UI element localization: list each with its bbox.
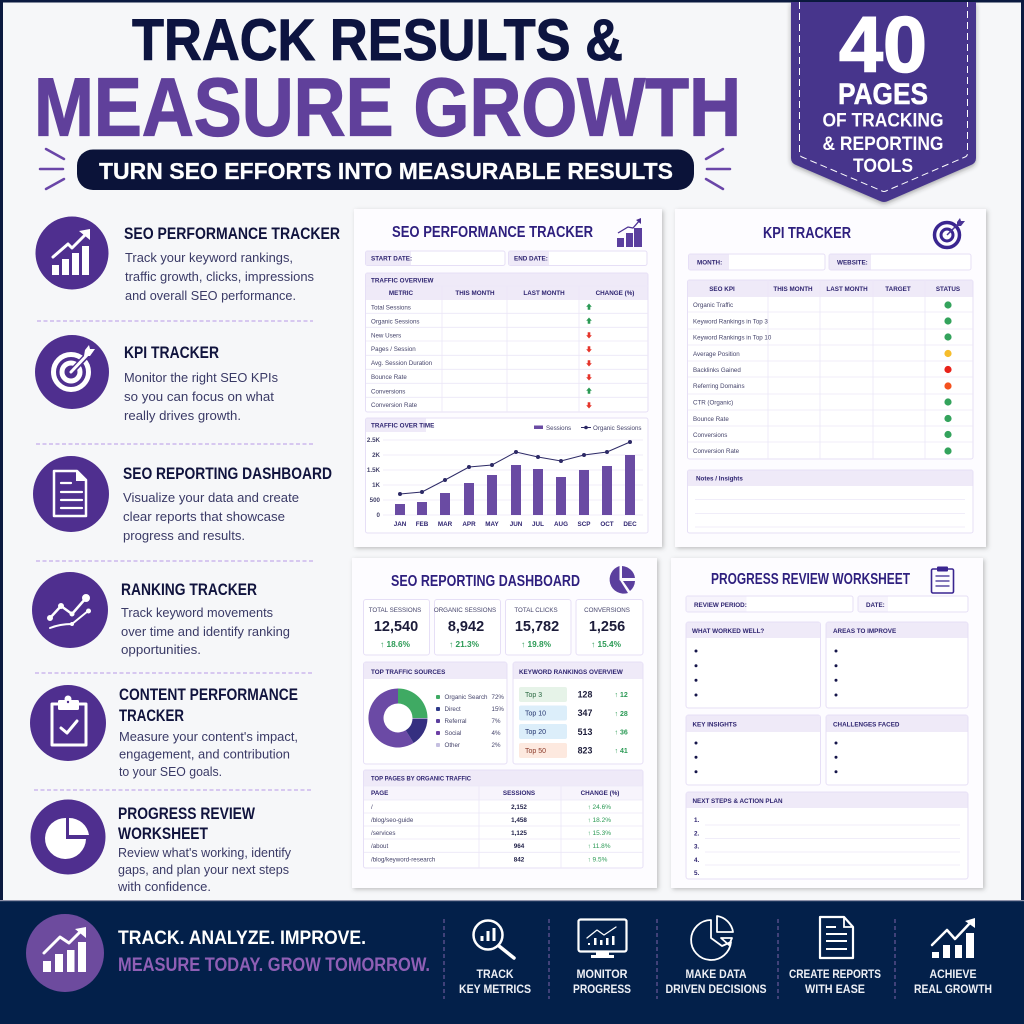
- footer tagline: [118, 927, 430, 976]
- panel title: SEO PERFORMANCE TRACKER: [392, 224, 593, 241]
- panel title: SEO REPORTING DASHBOARD: [391, 573, 580, 590]
- description: Review what's working, identify: [118, 845, 291, 860]
- keyword rankings overview: 513: [578, 727, 592, 737]
- icon: document: [33, 456, 109, 532]
- icon: ranking lines: [32, 572, 108, 648]
- fields: MONTH:: [697, 260, 722, 266]
- keyword rankings overview: ↑ 41: [614, 748, 628, 755]
- legend: Direct: [444, 706, 461, 713]
- table: SEO KPI: Bounce Rate: [693, 416, 729, 423]
- table: SEO KPI: Conversions: [693, 432, 727, 439]
- description: Visualize your data and create: [123, 490, 299, 505]
- KPI cards: ↑ 18.6%: [380, 639, 411, 649]
- icon: clipboard check: [30, 685, 106, 761]
- line: organic sessions: [398, 440, 632, 496]
- table: traffic overview: Avg. Session Duration: [371, 360, 433, 367]
- date fields: [366, 251, 647, 266]
- donut chart: [368, 688, 428, 747]
- table: traffic overview: Conversions: [371, 388, 405, 396]
- table: traffic overview: CHANGE (%): [596, 290, 634, 297]
- description: [123, 490, 299, 543]
- fields: DATE:: [866, 602, 885, 609]
- table: top pages by organic traffic: 2,152: [511, 804, 527, 811]
- table: top pages by organic traffic: ↑ 24.6%: [588, 804, 611, 811]
- table: top pages by organic traffic: TOP PAGES BY ORGANIC TRAFFIC: [371, 776, 471, 782]
- feature: achieve real growth: REAL GROWTH: [914, 982, 992, 996]
- section: challenges faced: CHALLENGES FACED: [833, 722, 900, 728]
- description: clear reports that showcase: [123, 509, 285, 524]
- top traffic sources: [364, 662, 507, 764]
- chart: traffic over time: [366, 418, 648, 533]
- description: over time and identify ranking: [121, 624, 290, 639]
- badge: 40 pages: TOOLS: [853, 155, 913, 177]
- chart: traffic over time: AUG: [554, 521, 568, 528]
- heading: SEO REPORTING DASHBOARD: [123, 465, 332, 483]
- keyword rankings overview: KEYWORD RANKINGS OVERVIEW: [519, 669, 623, 676]
- keyword rankings overview: Top 3: [525, 692, 542, 699]
- title: TRACK RESULTS &: [132, 8, 623, 73]
- fields: [686, 596, 968, 612]
- panel title: KPI TRACKER: [763, 225, 851, 242]
- table: traffic overview: LAST MONTH: [523, 290, 565, 297]
- feature: achieve real growth: [914, 918, 992, 996]
- section: next steps and action plan: 3.: [694, 844, 700, 850]
- keyword rankings overview: Top 10: [525, 710, 546, 718]
- description: Monitor the right SEO KPIs: [124, 370, 278, 385]
- heading: RANKING TRACKER: [121, 581, 257, 599]
- badge: 40 pages: [791, 0, 976, 202]
- description: gaps, and plan your next steps: [118, 862, 289, 877]
- table: top pages by organic traffic: 964: [514, 843, 525, 850]
- table: traffic overview: New Users: [371, 332, 401, 340]
- section: areas to improve: AREAS TO IMPROVE: [833, 628, 896, 635]
- table: traffic overview: Bounce Rate: [371, 374, 407, 381]
- feature: make data driven decisions: DRIVEN DECISIONS: [666, 982, 766, 996]
- icon: clipboard: [932, 566, 954, 593]
- date fields: START DATE:: [371, 256, 412, 262]
- keyword rankings overview: 128: [578, 690, 592, 700]
- feature: achieve real growth: ACHIEVE: [930, 967, 976, 981]
- description: with confidence.: [117, 879, 211, 894]
- table: SEO KPI: STATUS: [936, 286, 960, 293]
- item: KPI tracker: [35, 335, 278, 423]
- description: Track keyword movements: [121, 605, 273, 620]
- feature: monitor progress: [573, 920, 631, 996]
- section: next steps and action plan: 4.: [694, 857, 700, 864]
- icon: growth chart: [36, 216, 108, 290]
- description: [124, 370, 278, 423]
- keyword rankings overview: ↑ 12: [614, 692, 628, 699]
- KPI cards: ↑ 21.3%: [449, 639, 480, 649]
- feature: make data driven decisions: MAKE DATA: [686, 967, 747, 981]
- table: top pages by organic traffic: SESSIONS: [503, 790, 535, 797]
- section: what worked well: [686, 622, 820, 708]
- description: progress and results.: [123, 528, 245, 543]
- legend: Organic Sessions: [593, 425, 642, 432]
- heading: PROGRESS REVIEW: [118, 805, 255, 823]
- icon: monitor: [578, 920, 626, 958]
- heading: SEO PERFORMANCE TRACKER: [124, 225, 340, 243]
- legend: Referral: [444, 718, 467, 725]
- KPI cards: [364, 600, 643, 655]
- description: [119, 729, 298, 779]
- table: SEO KPI: Referring Domains: [693, 383, 745, 390]
- KPI cards: ORGANIC SESSIONS: [434, 607, 496, 614]
- description: [125, 250, 314, 303]
- subtitle pill: TURN SEO EFFORTS INTO MEASURABLE RESULTS: [99, 158, 673, 184]
- section: key insights: KEY INSIGHTS: [692, 722, 737, 728]
- legend: Other: [444, 742, 460, 749]
- keyword rankings overview: Top 50: [525, 748, 546, 755]
- KPI cards: 15,782: [515, 619, 559, 635]
- badge: 40 pages: OF TRACKING: [822, 110, 944, 132]
- KPI cards: TOTAL CLICKS: [514, 607, 558, 614]
- footer tagline: MEASURE TODAY. GROW TOMORROW.: [118, 954, 430, 976]
- KPI cards: CONVERSIONS: [584, 607, 630, 614]
- keyword rankings overview: 823: [578, 746, 592, 756]
- keyword rankings overview: 347: [578, 708, 592, 718]
- footer band: [0, 900, 1024, 1024]
- feature: track key metrics: [459, 920, 531, 996]
- item: content performance tracker: [30, 685, 298, 779]
- table: top pages by organic traffic: ↑ 11.8%: [588, 843, 611, 850]
- title: [34, 8, 741, 154]
- table: traffic overview: Pages / Session: [371, 346, 416, 353]
- section: next steps and action plan: NEXT STEPS & ACTION PLAN: [692, 798, 783, 805]
- feature: track key metrics: TRACK: [476, 967, 514, 981]
- table: SEO KPI: LAST MONTH: [826, 286, 868, 293]
- chart: traffic over time: APR: [462, 521, 476, 528]
- chart: traffic over time: JUN: [510, 521, 523, 528]
- legend: Organic Search: [444, 694, 488, 701]
- description: opportunities.: [121, 642, 201, 657]
- KPI cards: 8,942: [448, 619, 484, 635]
- table: SEO KPI: Conversion Rate: [693, 448, 740, 455]
- heading: [119, 686, 298, 725]
- keyword rankings overview: ↑ 28: [614, 711, 628, 718]
- KPI cards: TOTAL SESSIONS: [369, 607, 421, 614]
- legend: 15%: [492, 706, 504, 713]
- footer logo icon: [26, 914, 104, 992]
- chart: traffic over time: SCP: [578, 521, 590, 528]
- table: traffic overview: Total Sessions: [371, 304, 411, 312]
- section: areas to improve: [826, 622, 968, 708]
- fields: [688, 254, 971, 270]
- table: SEO KPI: Keyword Rankings in Top 10: [693, 334, 772, 342]
- feature: monitor progress: MONITOR: [576, 967, 628, 981]
- table: top pages by organic traffic: /blog/seo-guide: [371, 817, 414, 824]
- chart: traffic over time: 500: [370, 497, 381, 504]
- KPI cards: ↑ 19.8%: [521, 639, 552, 649]
- heading: TRACKER: [119, 707, 184, 725]
- keyword rankings overview: ↑ 36: [614, 730, 628, 736]
- badge: 40 pages: 40: [839, 0, 927, 88]
- panel: KPI tracker: [675, 209, 986, 547]
- chart: traffic over time: OCT: [600, 521, 614, 528]
- table: traffic overview: METRIC: [389, 290, 414, 297]
- legend: 7%: [492, 718, 501, 725]
- chart: traffic over time: MAY: [485, 521, 500, 528]
- icon: target: [35, 335, 109, 409]
- heading: KPI TRACKER: [124, 344, 219, 362]
- chart: traffic over time: 2K: [372, 452, 381, 459]
- table: top pages by organic traffic: 1,458: [511, 817, 527, 824]
- bars: [395, 455, 635, 515]
- keyword rankings overview: [513, 662, 643, 764]
- table: top pages by organic traffic: PAGE: [371, 790, 388, 797]
- feature: monitor progress: PROGRESS: [573, 982, 631, 996]
- legend: Social: [444, 730, 461, 737]
- panel title: PROGRESS REVIEW WORKSHEET: [711, 571, 910, 588]
- section: key insights: [686, 715, 820, 785]
- icon: pie chart: [30, 800, 106, 874]
- fields: REVIEW PERIOD:: [694, 602, 747, 609]
- icon: target: [934, 218, 965, 248]
- description: [121, 605, 290, 657]
- legend: [436, 694, 504, 749]
- table: SEO KPI: Backlinks Gained: [693, 367, 741, 374]
- top traffic sources: TOP TRAFFIC SOURCES: [371, 669, 445, 676]
- fields: WEBSITE:: [837, 260, 868, 266]
- section: what worked well: WHAT WORKED WELL?: [692, 628, 764, 635]
- feature: create reports with ease: [789, 917, 881, 996]
- section: next steps and action plan: [686, 792, 968, 879]
- table: top pages by organic traffic: ↑ 9.5%: [588, 856, 608, 864]
- date fields: END DATE:: [514, 256, 548, 262]
- description: [117, 845, 291, 894]
- chart: traffic over time: DEC: [623, 521, 637, 528]
- title accent line: MEASURE GROWTH: [34, 60, 741, 154]
- item: SEO performance tracker: [36, 216, 340, 303]
- table: SEO KPI: Organic Traffic: [693, 302, 733, 309]
- notes section: Notes / Insights: [696, 476, 743, 482]
- heading: WORKSHEET: [118, 825, 208, 843]
- feature: create reports with ease: CREATE REPORTS: [789, 967, 881, 981]
- feature: make data driven decisions: [666, 916, 766, 996]
- icon: pie outline: [691, 916, 733, 960]
- chart: traffic over time: 2.5K: [367, 437, 381, 444]
- badge: 40 pages: PAGES: [838, 78, 928, 111]
- subtitle pill: [77, 150, 694, 190]
- chart: traffic over time: TRAFFIC OVER TIME: [371, 422, 434, 430]
- panel: SEO performance tracker: [354, 209, 662, 547]
- description: really drives growth.: [124, 408, 241, 423]
- table: SEO KPI: TARGET: [885, 286, 911, 293]
- footer tagline: TRACK. ANALYZE. IMPROVE.: [118, 927, 366, 949]
- icon: magnifier: [474, 920, 514, 958]
- panel: SEO reporting dashboard: [352, 558, 657, 888]
- legend: 2%: [492, 742, 501, 749]
- table: top pages by organic traffic: 842: [514, 856, 525, 864]
- description: Track your keyword rankings,: [125, 250, 293, 265]
- table: SEO KPI: THIS MONTH: [773, 286, 813, 293]
- feature: create reports with ease: WITH EASE: [805, 982, 865, 996]
- item: progress review worksheet: [30, 800, 291, 894]
- badge: 40 pages: & REPORTING: [822, 133, 944, 155]
- legend: Sessions: [546, 425, 571, 432]
- table: top pages by organic traffic: 1,125: [511, 830, 527, 837]
- table: SEO KPI: CTR (Organic): [693, 400, 733, 406]
- table: traffic overview: Organic Sessions: [371, 318, 420, 326]
- legend: [534, 425, 642, 432]
- KPI cards: 1,256: [589, 619, 625, 635]
- table: traffic overview: TRAFFIC OVERVIEW: [371, 278, 434, 284]
- table: top pages by organic traffic: /about: [371, 843, 388, 850]
- chart: traffic over time: JAN: [394, 521, 407, 528]
- chart: traffic over time: JUL: [532, 521, 544, 528]
- section: next steps and action plan: 2.: [694, 830, 700, 838]
- table: traffic overview: Conversion Rate: [371, 402, 418, 409]
- feature: track key metrics: KEY METRICS: [459, 982, 531, 996]
- table: traffic overview: THIS MONTH: [455, 290, 495, 297]
- item: ranking tracker: [32, 572, 290, 657]
- table: SEO KPI: SEO KPI: [709, 286, 735, 293]
- description: to your SEO goals.: [119, 764, 222, 779]
- notes section: [688, 470, 973, 533]
- table: top pages by organic traffic: /: [371, 804, 373, 811]
- table: top pages by organic traffic: CHANGE (%): [581, 790, 619, 797]
- table: top pages by organic traffic: [364, 770, 643, 868]
- chart: traffic over time: 0: [377, 512, 381, 519]
- icon: document: [820, 917, 853, 958]
- legend: 72%: [492, 694, 504, 701]
- icon: growth bars: [617, 218, 642, 247]
- item: SEO reporting dashboard: [33, 456, 332, 543]
- table: top pages by organic traffic: ↑ 18.2%: [588, 817, 611, 824]
- chart: traffic over time: 1.5K: [367, 467, 381, 474]
- KPI cards: ↑ 15.4%: [591, 639, 622, 649]
- section: next steps and action plan: 5.: [694, 870, 700, 877]
- status dots: [944, 301, 952, 455]
- icon: pie: [610, 566, 635, 594]
- table: top pages by organic traffic: /services: [371, 830, 395, 837]
- chart: traffic over time: FEB: [416, 521, 429, 528]
- description: so you can focus on what: [124, 389, 274, 404]
- keyword rankings overview: Top 20: [525, 729, 546, 736]
- chart: traffic over time: 1K: [372, 482, 381, 489]
- description: traffic growth, clicks, impressions: [125, 269, 314, 284]
- table: traffic overview: [366, 273, 648, 412]
- heading: [118, 805, 255, 843]
- table: top pages by organic traffic: /blog/keyword-research: [371, 856, 436, 864]
- description: and overall SEO performance.: [125, 288, 296, 303]
- description: Measure your content's impact,: [119, 729, 298, 744]
- description: engagement, and contribution: [119, 746, 290, 762]
- heading: CONTENT PERFORMANCE: [119, 686, 298, 704]
- icon: growth chart: [932, 918, 975, 958]
- chart: traffic over time: MAR: [438, 521, 453, 528]
- section: next steps and action plan: 1.: [694, 817, 700, 824]
- decorative bursts beside pill: [40, 149, 730, 189]
- panel: progress review worksheet: [671, 558, 983, 888]
- legend: 4%: [492, 730, 501, 737]
- table: SEO KPI: Keyword Rankings in Top 3: [693, 318, 768, 326]
- KPI cards: 12,540: [374, 619, 418, 635]
- table: SEO KPI: [688, 280, 973, 459]
- table: top pages by organic traffic: ↑ 15.3%: [588, 830, 611, 837]
- section: challenges faced: [826, 715, 968, 785]
- table: SEO KPI: Average Position: [693, 351, 740, 358]
